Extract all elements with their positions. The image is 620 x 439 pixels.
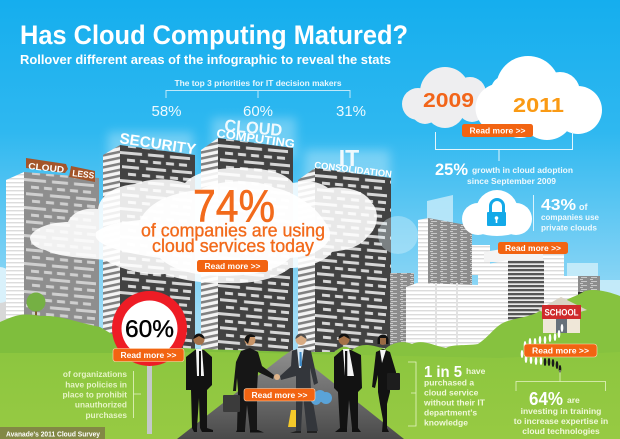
building: security bbox=[103, 145, 195, 350]
stat: 64 percent: 64% bbox=[529, 389, 563, 409]
button: policies: Read more >> bbox=[120, 351, 177, 360]
priority percentages: 58% bbox=[151, 103, 182, 120]
button: people: Read more >> bbox=[252, 391, 308, 400]
divider: private clouds bbox=[532, 195, 534, 231]
label: it consolidation: IT bbox=[339, 145, 359, 171]
policies text bbox=[62, 369, 127, 420]
source credit: Avanade's 2011 Cloud Survey bbox=[6, 430, 100, 438]
grass right hill bbox=[330, 290, 620, 439]
stat: 74 percent: of companies are using bbox=[141, 220, 325, 240]
stat: 43 percent: private clouds bbox=[541, 222, 597, 232]
label: cloud computing bbox=[216, 116, 296, 151]
person 5 bbox=[372, 334, 400, 432]
sign: cloudless: CLOUD bbox=[28, 161, 65, 175]
growth bracket bbox=[436, 132, 572, 161]
source credit bbox=[0, 427, 105, 439]
stat: 43 percent bbox=[541, 197, 599, 232]
stat: 25 percent growth: 25% bbox=[435, 160, 468, 179]
stat: 1 in 5: 1 in 5 bbox=[424, 364, 462, 381]
priority percentages bbox=[151, 103, 366, 120]
building: it consolidation bbox=[298, 168, 391, 358]
button: private clouds bbox=[498, 242, 568, 254]
glow behind towers bbox=[108, 118, 390, 185]
policies bracket bbox=[134, 371, 141, 418]
label: it consolidation bbox=[314, 145, 393, 180]
building: cloud computing bbox=[201, 138, 293, 358]
priority percentages: 31% bbox=[336, 103, 366, 120]
stat: 74 percent bbox=[141, 180, 325, 256]
person 2 handshake bbox=[233, 334, 280, 432]
stat: 74 percent: 74% bbox=[193, 180, 275, 232]
stat: 1 in 5: knowledge bbox=[424, 418, 468, 428]
person 3 handshake bbox=[280, 334, 318, 433]
sign: cloudless: LESS bbox=[72, 168, 95, 181]
label: cloud computing: COMPUTING bbox=[216, 126, 296, 151]
button: private clouds: Read more >> bbox=[505, 244, 561, 253]
policies text: purchases bbox=[85, 410, 127, 420]
button: 74 percent: Read more >> bbox=[204, 262, 261, 271]
subtitle: Rollover different areas of the infographic to reveal the stats bbox=[20, 52, 391, 67]
grass foreground bbox=[0, 352, 620, 439]
stat: 64 percent: to increase expertise in bbox=[514, 416, 608, 426]
title: Has Cloud Computing Matured? bbox=[20, 20, 408, 50]
label: security: SECURITY bbox=[118, 130, 197, 158]
background city left bbox=[0, 267, 14, 325]
stat: 1 in 5: department’s bbox=[424, 408, 477, 418]
policies text: unauthorized bbox=[75, 400, 127, 410]
grass left hill bbox=[0, 315, 620, 439]
stat: 43 percent: of bbox=[579, 202, 588, 212]
label: cloud computing: CLOUD bbox=[224, 116, 283, 140]
person 1 bbox=[186, 334, 213, 432]
people path to school bbox=[521, 324, 563, 373]
priorities heading with bracket bbox=[166, 78, 350, 98]
school: SCHOOL bbox=[544, 308, 579, 318]
button: 74 percent bbox=[197, 260, 268, 272]
1 in 5 bracket bbox=[408, 362, 416, 426]
policies text: place to prohibit bbox=[62, 390, 127, 400]
stat: 1 in 5: purchased a bbox=[424, 378, 474, 388]
button: school: Read more >> bbox=[532, 346, 589, 356]
tree bbox=[26, 292, 46, 318]
priorities heading with bracket: The top 3 priorities for IT decision makers bbox=[174, 78, 342, 88]
stat: 64 percent: investing in training bbox=[521, 406, 601, 416]
school bbox=[538, 297, 587, 333]
stat: 1 in 5: without their IT bbox=[423, 398, 486, 408]
button: school bbox=[524, 344, 597, 357]
year 2011: 2011 bbox=[513, 94, 564, 117]
priority percentages: 60% bbox=[243, 103, 273, 120]
stat: 1 in 5: cloud service bbox=[424, 388, 479, 398]
stop sign 60 percent: 60% bbox=[125, 316, 174, 343]
road marking bbox=[288, 410, 297, 427]
policies text: of organizations bbox=[63, 369, 127, 379]
right city bbox=[378, 195, 620, 354]
button: policies bbox=[113, 348, 184, 362]
stat: 1 in 5 bbox=[423, 364, 486, 428]
policies text: have policies in bbox=[65, 380, 127, 390]
button: growth: Read more >> bbox=[470, 126, 526, 136]
stop sign 60 percent bbox=[112, 291, 187, 366]
cloud 2009 bbox=[402, 67, 486, 128]
sign pole bbox=[147, 362, 152, 434]
large central cloud bbox=[30, 168, 377, 283]
training bracket bbox=[516, 370, 606, 391]
briefcase bbox=[223, 395, 240, 412]
stat: 64 percent: cloud technologies bbox=[522, 426, 600, 436]
stat: 64 percent: are bbox=[567, 395, 580, 405]
stat: 1 in 5: have bbox=[466, 366, 486, 376]
stat: 64 percent bbox=[514, 389, 608, 436]
stat: 25 percent growth bbox=[435, 160, 573, 186]
blue cloud held bbox=[311, 390, 332, 405]
stat: 25 percent growth: growth in cloud adoption bbox=[472, 165, 573, 175]
label: it consolidation: CONSOLIDATION bbox=[314, 160, 393, 180]
button: growth bbox=[462, 124, 533, 137]
person 4 bbox=[334, 334, 362, 432]
stat: 43 percent: 43% bbox=[541, 197, 576, 214]
cloud 2011 bbox=[476, 56, 602, 140]
stat: 43 percent: companies use bbox=[541, 212, 599, 222]
private cloud with lock bbox=[462, 190, 532, 236]
stat: 74 percent: cloud services today bbox=[152, 236, 314, 256]
road bbox=[177, 350, 404, 439]
year 2009: 2009 bbox=[423, 89, 474, 112]
button: people bbox=[244, 388, 315, 401]
building: cloudless bbox=[6, 172, 99, 337]
stat: 25 percent growth: since September 2009 bbox=[467, 176, 556, 186]
sign: cloudless bbox=[26, 158, 95, 182]
